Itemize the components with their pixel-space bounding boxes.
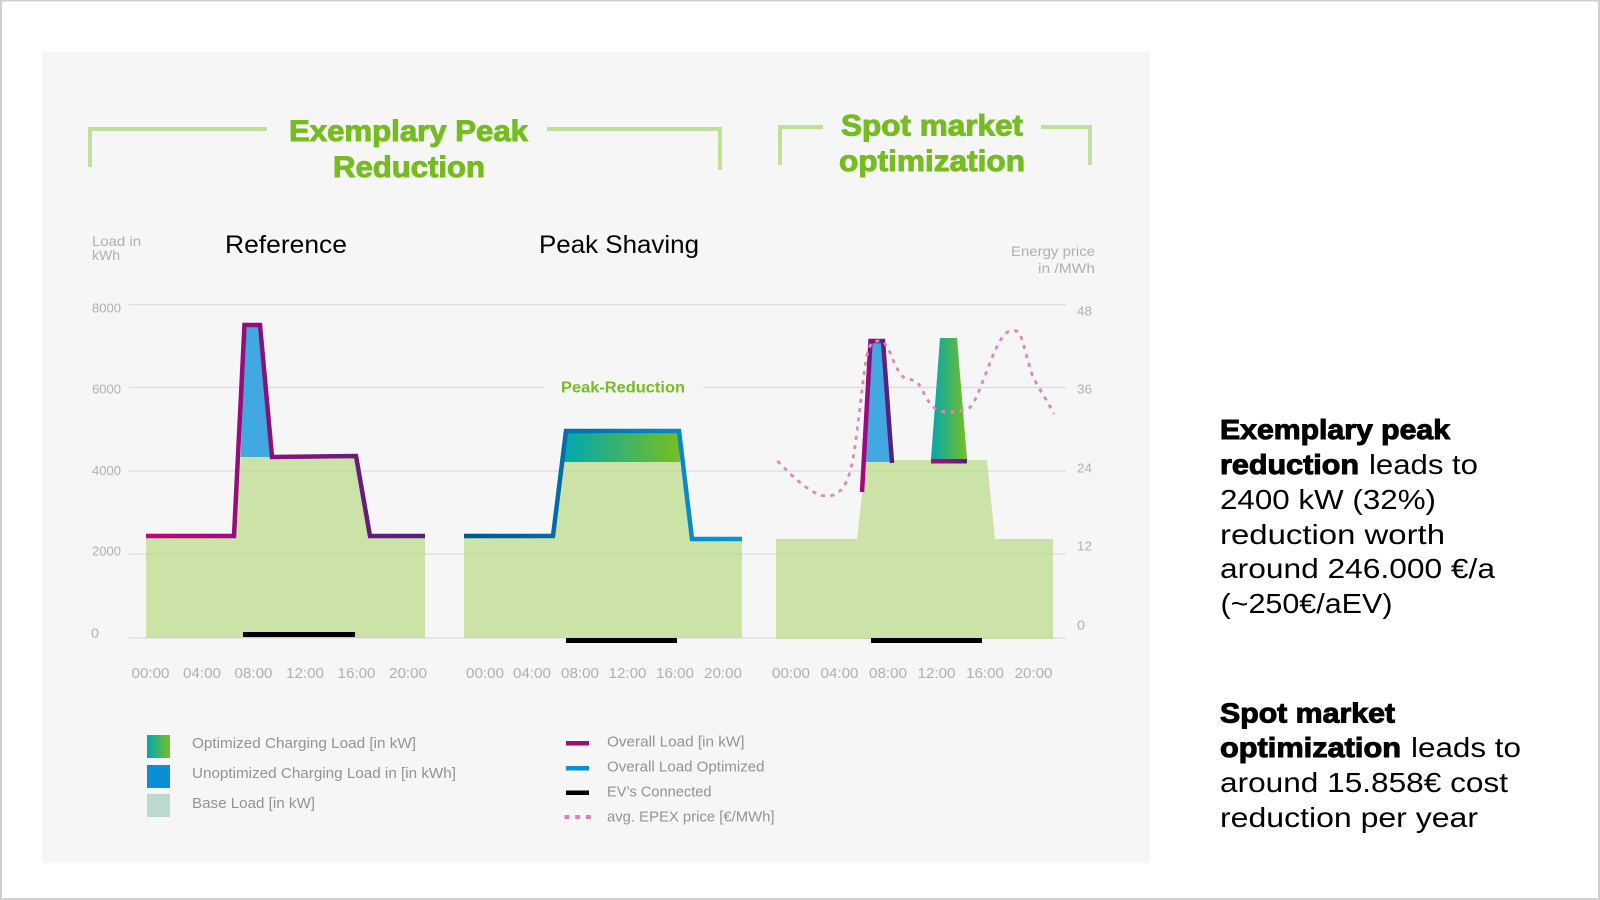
left axis title: Load in [92, 233, 141, 249]
text block: spot market summary: Spot market [1220, 698, 1395, 728]
time axis: 08:00 [234, 666, 272, 682]
right axis labels: 36 [1077, 382, 1092, 396]
heading: Spot market optimization: optimization [839, 145, 1025, 178]
time axis [772, 666, 1052, 682]
base load area [146, 457, 425, 638]
chart heading: Reference: Reference [225, 231, 347, 259]
chart: Spot market optimization [772, 331, 1054, 682]
EPEX price curve [777, 331, 1054, 496]
heading: Exemplary Peak Reduction [90, 115, 720, 184]
peak reduction label: Peak-Reduction [561, 380, 685, 396]
text block: spot market summary: leads to [1411, 732, 1521, 763]
left axis labels: 8000 [92, 300, 121, 316]
text block: peak reduction summary: reduction worth [1220, 519, 1445, 550]
text block: spot market summary: reduction per year [1220, 802, 1478, 833]
time axis: 12:00 [608, 666, 646, 682]
legend: area series [147, 735, 456, 817]
base load area [776, 460, 1053, 639]
unoptimized charging peak [241, 327, 271, 457]
legend item: unoptimized charging load [147, 765, 456, 788]
time axis: 08:00 [561, 666, 599, 682]
legend item: EVs connected: EV’s Connected [607, 784, 712, 800]
time axis: 16:00 [338, 666, 376, 682]
time axis: 16:00 [966, 666, 1004, 682]
overall load line [146, 325, 425, 536]
time axis: 20:00 [704, 666, 742, 682]
text block: peak reduction summary: leads to [1369, 449, 1478, 480]
legend item: optimized charging load: Optimized Charging Load [in kW] [192, 736, 416, 752]
heading: Exemplary Peak Reduction: Exemplary Peak [289, 115, 528, 148]
EVs connected bar [243, 632, 355, 637]
legend item: EPEX price: avg. EPEX price [€/MWh] [607, 810, 774, 826]
text block: spot market summary: around 15.858€ cost [1220, 767, 1508, 798]
time axis [132, 666, 427, 682]
left axis labels: 2000 [92, 544, 121, 558]
heading: Exemplary Peak Reduction: Reduction [333, 151, 485, 184]
text block: peak reduction summary: (~250€/aEV) [1220, 588, 1392, 619]
overall load at optimized peak [931, 459, 967, 464]
panel: chart background [42, 52, 1150, 863]
right axis labels: 24 [1077, 460, 1092, 476]
left axis labels: 6000 [92, 382, 121, 396]
text block: peak reduction summary: 2400 kW (32%) [1220, 484, 1436, 515]
heading: Spot market optimization: Spot market [841, 110, 1023, 142]
legend: line series [564, 734, 774, 826]
time axis [466, 666, 742, 682]
legend item: optimized charging load [147, 735, 416, 758]
heading: Spot market optimization [780, 110, 1090, 178]
text block: peak reduction summary: Exemplary peak [1220, 414, 1450, 445]
chart heading: Peak Shaving: Peak Shaving [539, 231, 699, 259]
left axis title [92, 233, 141, 263]
left axis labels: 0 [91, 626, 99, 640]
legend item: unoptimized charging load: Unoptimized Charging Load in [in kWh] [192, 766, 456, 782]
text block: peak reduction summary: around 246.000 €/a [1220, 553, 1495, 584]
text block: peak reduction summary [1220, 414, 1495, 619]
left axis title: kWh [92, 247, 120, 263]
time axis: 12:00 [918, 666, 956, 682]
legend item: base load: Base Load [in kW] [192, 796, 315, 812]
text block: spot market summary [1220, 698, 1521, 833]
text block: peak reduction summary: reduction [1220, 449, 1359, 480]
chart: Peak Shaving [464, 380, 742, 682]
legend item: base load [147, 794, 315, 817]
text block: spot market summary: optimization [1220, 732, 1401, 763]
optimized load line [464, 431, 742, 539]
optimized charging load [564, 432, 680, 462]
time axis: 08:00 [869, 666, 907, 682]
time axis: 12:00 [286, 666, 324, 682]
time axis: 00:00 [466, 666, 504, 682]
chart: Reference [132, 325, 427, 682]
EVs connected bar [871, 638, 982, 643]
time axis: 04:00 [183, 666, 221, 682]
unoptimized charging peak [865, 342, 890, 462]
left axis labels [91, 300, 121, 640]
right axis labels: 0 [1077, 618, 1085, 632]
base load area [464, 462, 742, 638]
right axis title: Energy price [1011, 243, 1095, 259]
legend item: overall load: Overall Load [in kW] [607, 734, 744, 750]
right axis title [1011, 243, 1095, 276]
optimized charging peak [931, 338, 967, 459]
time axis: 00:00 [772, 666, 810, 682]
time axis: 04:00 [513, 666, 551, 682]
time axis: 20:00 [1014, 666, 1052, 682]
right axis title: in /MWh [1038, 260, 1095, 276]
time axis: 16:00 [656, 666, 694, 682]
time axis: 04:00 [820, 666, 858, 682]
EVs connected bar [566, 638, 677, 643]
left axis labels: 4000 [92, 463, 121, 478]
time axis: 00:00 [132, 666, 170, 682]
legend item: overall load optimized: Overall Load Optimized [607, 760, 764, 776]
right axis labels [1077, 304, 1092, 632]
right axis labels: 12 [1077, 538, 1092, 554]
right axis labels: 48 [1077, 304, 1092, 318]
overall load line [862, 341, 892, 492]
time axis: 20:00 [389, 666, 427, 682]
